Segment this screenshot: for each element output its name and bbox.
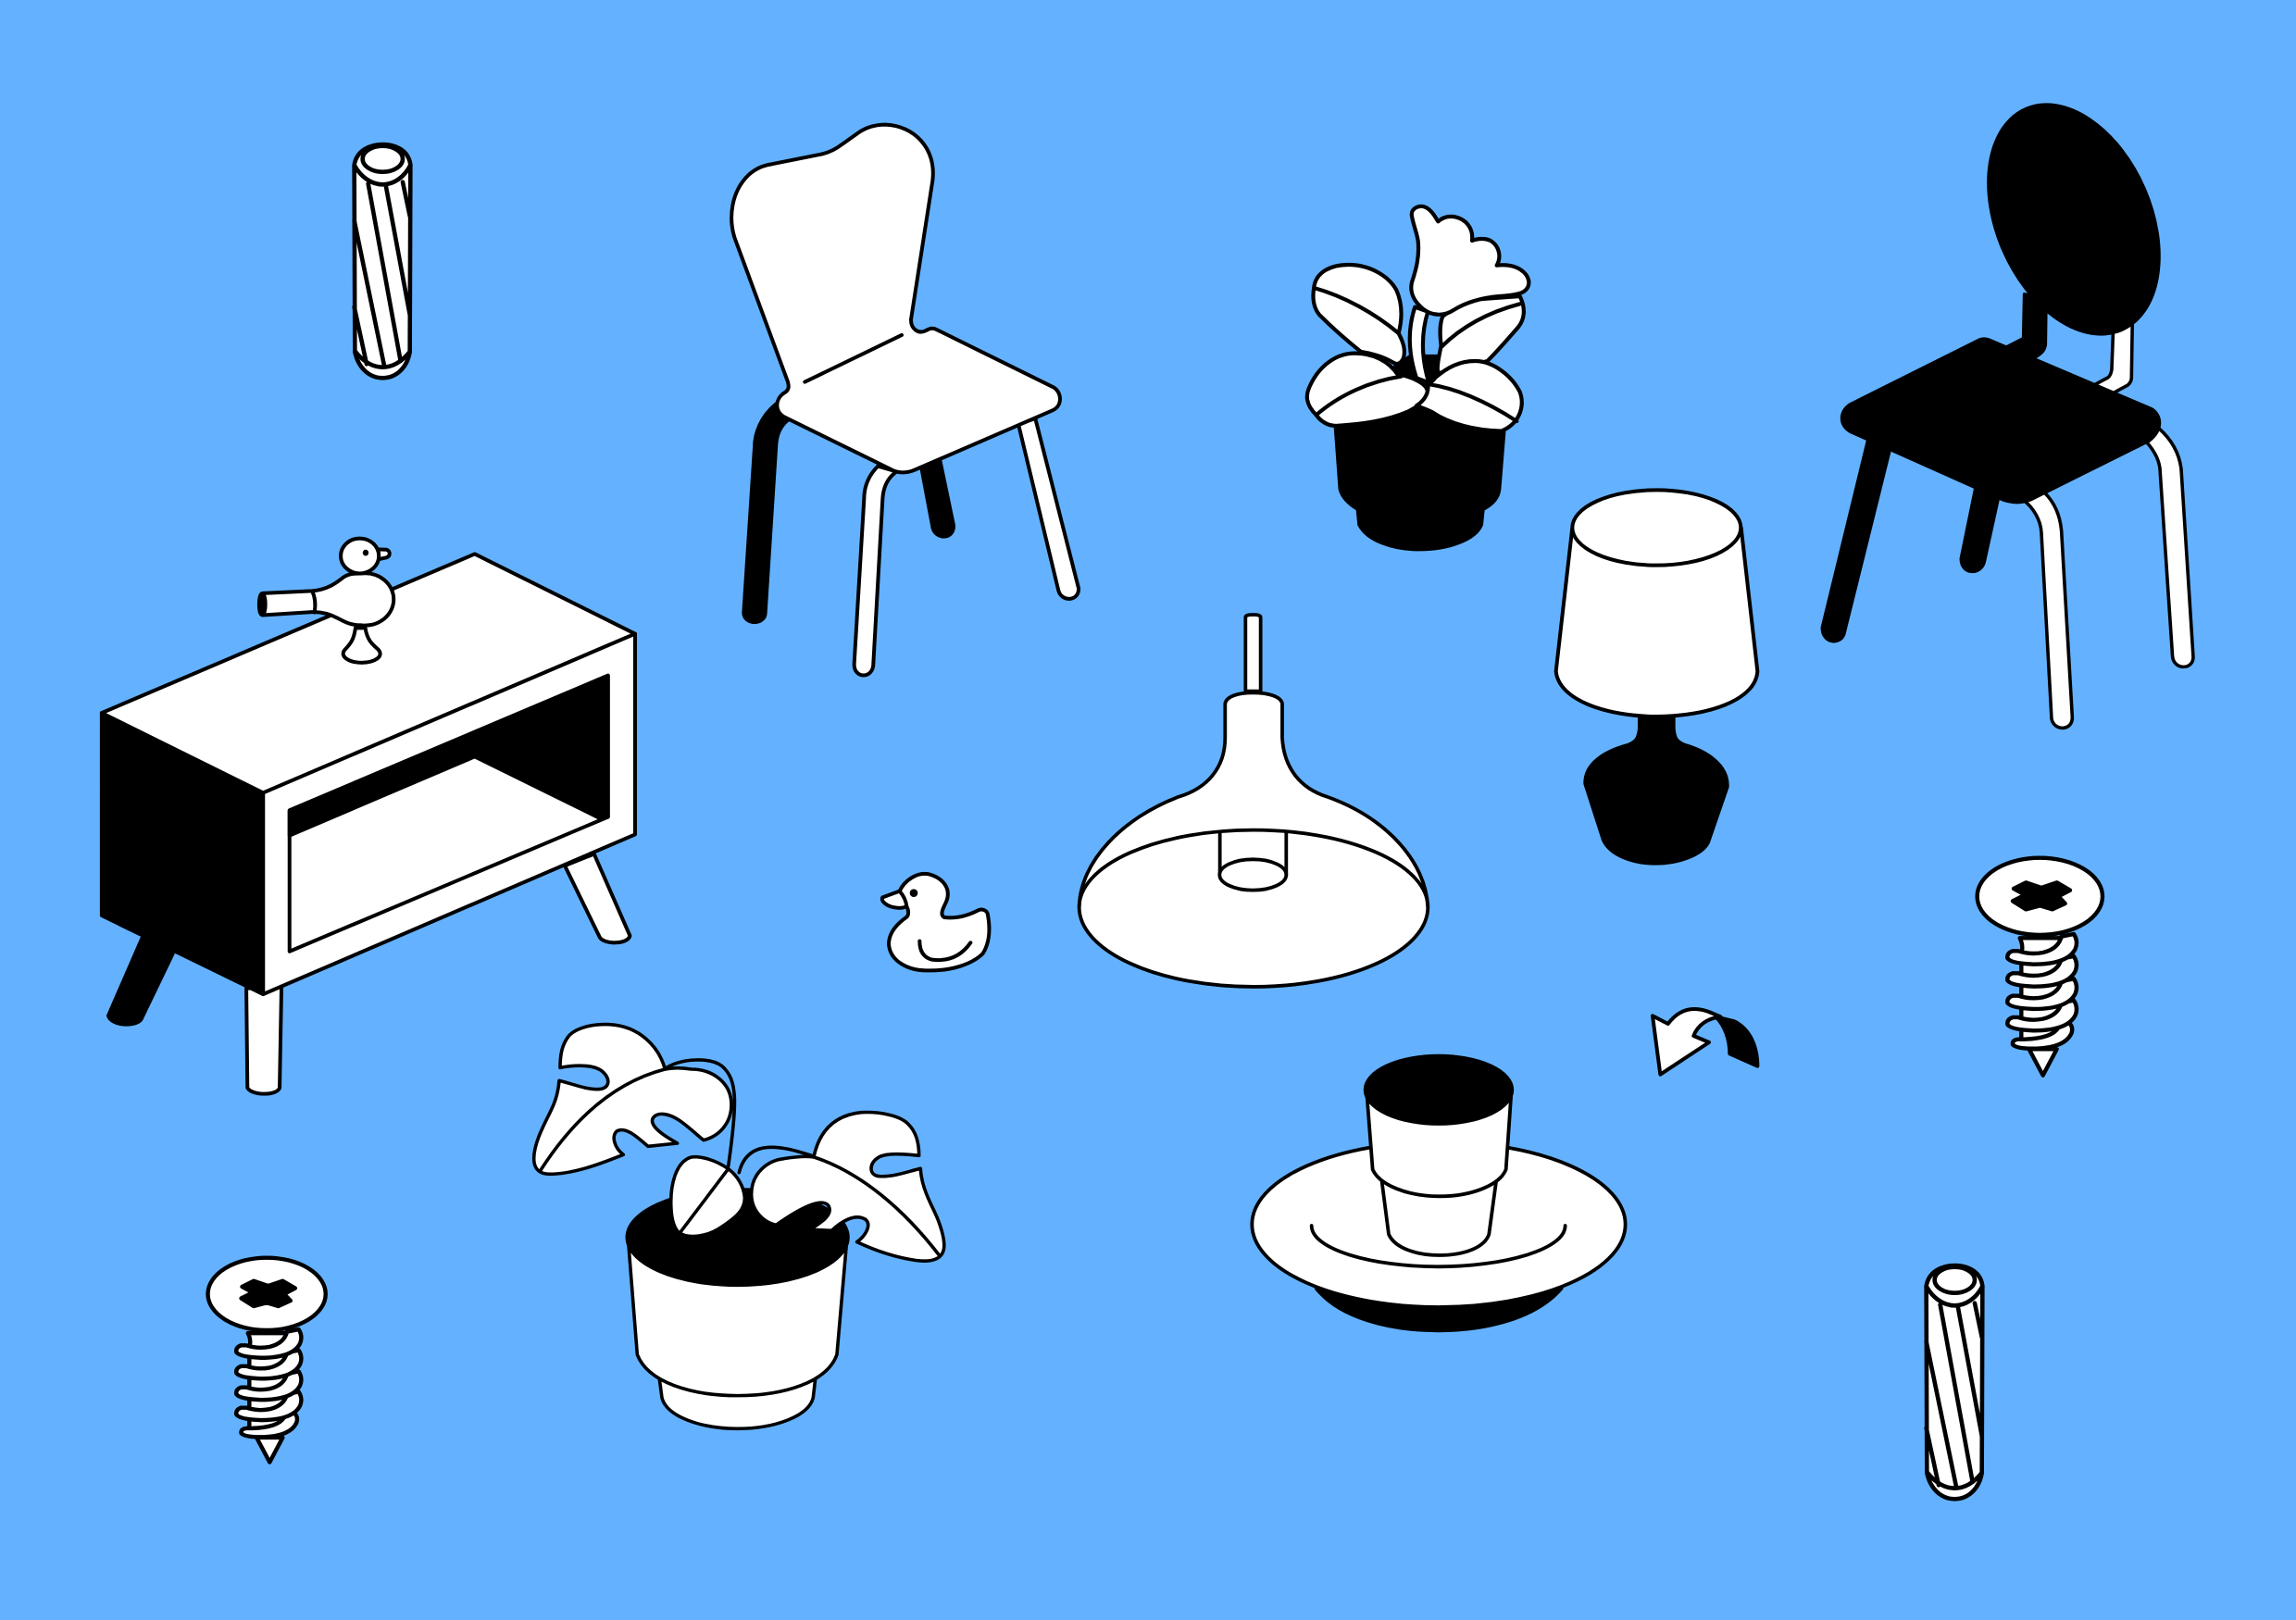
pendant lamp xyxy=(1079,615,1428,987)
screw: right xyxy=(1978,858,2103,1076)
cup on plate xyxy=(1252,1056,1626,1330)
rubber duck xyxy=(882,874,989,970)
screw: left xyxy=(208,1258,326,1463)
dowel: top left xyxy=(355,144,410,378)
white chair xyxy=(731,125,1079,676)
potted plant: black pot with flower xyxy=(1307,206,1529,549)
table lamp xyxy=(1556,490,1757,864)
curled arrow xyxy=(1653,1009,1757,1075)
dowel: bottom right xyxy=(1927,1265,1982,1499)
black chair xyxy=(1822,79,2193,728)
monstera plant in white pot xyxy=(534,1025,944,1428)
sideboard with toy bird xyxy=(102,539,635,1094)
